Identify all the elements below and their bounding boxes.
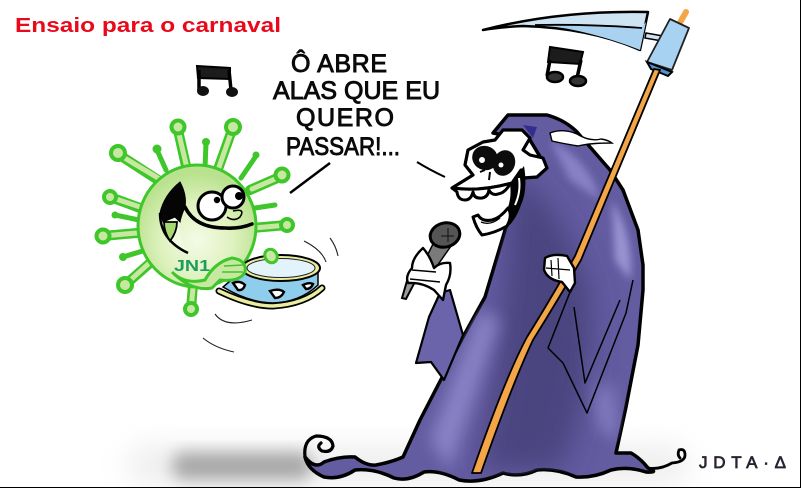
right sleeve folds bbox=[548, 280, 633, 413]
speech line to reaper bbox=[417, 162, 445, 177]
upper teeth bbox=[452, 183, 512, 200]
virus body bbox=[138, 165, 256, 287]
speech text: Ô ABRE bbox=[291, 49, 387, 78]
virus spikes bbox=[96, 120, 293, 315]
robe bbox=[305, 115, 654, 481]
scythe staff bbox=[472, 69, 660, 473]
signature: JDTA·Δ bbox=[699, 453, 786, 472]
hood patch bbox=[523, 125, 612, 146]
hand holding microphone bbox=[407, 248, 450, 300]
title: Ensaio para o carnaval bbox=[15, 15, 281, 37]
left sleeve bbox=[416, 290, 463, 380]
speech text: QUERO bbox=[296, 104, 394, 132]
microphone bbox=[402, 220, 463, 299]
virus label JN1: JN1 bbox=[174, 258, 210, 275]
scythe handle bbox=[647, 12, 689, 76]
speech text: PASSAR!... bbox=[286, 133, 400, 161]
virus mouth bbox=[160, 182, 252, 253]
mouth opening bbox=[473, 168, 524, 232]
speech text: ALAS QUE EU bbox=[273, 77, 440, 105]
music note right bbox=[547, 47, 586, 86]
nose marks bbox=[480, 170, 490, 180]
robe hem curls bbox=[305, 436, 685, 468]
music note left bbox=[197, 66, 238, 97]
eye sockets bbox=[468, 142, 502, 174]
virus character bbox=[96, 120, 293, 315]
scythe blade bbox=[483, 12, 663, 50]
speech text bbox=[273, 49, 440, 161]
mouth interior bbox=[500, 166, 525, 229]
motion lines bbox=[203, 238, 338, 352]
reaper character bbox=[305, 12, 689, 481]
hand holding staff bbox=[544, 255, 575, 292]
ground shadow bbox=[128, 445, 688, 485]
tambourine bbox=[219, 247, 322, 306]
jaw and lower teeth bbox=[473, 208, 510, 235]
skull bbox=[452, 130, 547, 235]
virus eyes bbox=[198, 186, 244, 220]
virus arm bbox=[172, 258, 245, 289]
speech line to virus bbox=[290, 163, 330, 193]
